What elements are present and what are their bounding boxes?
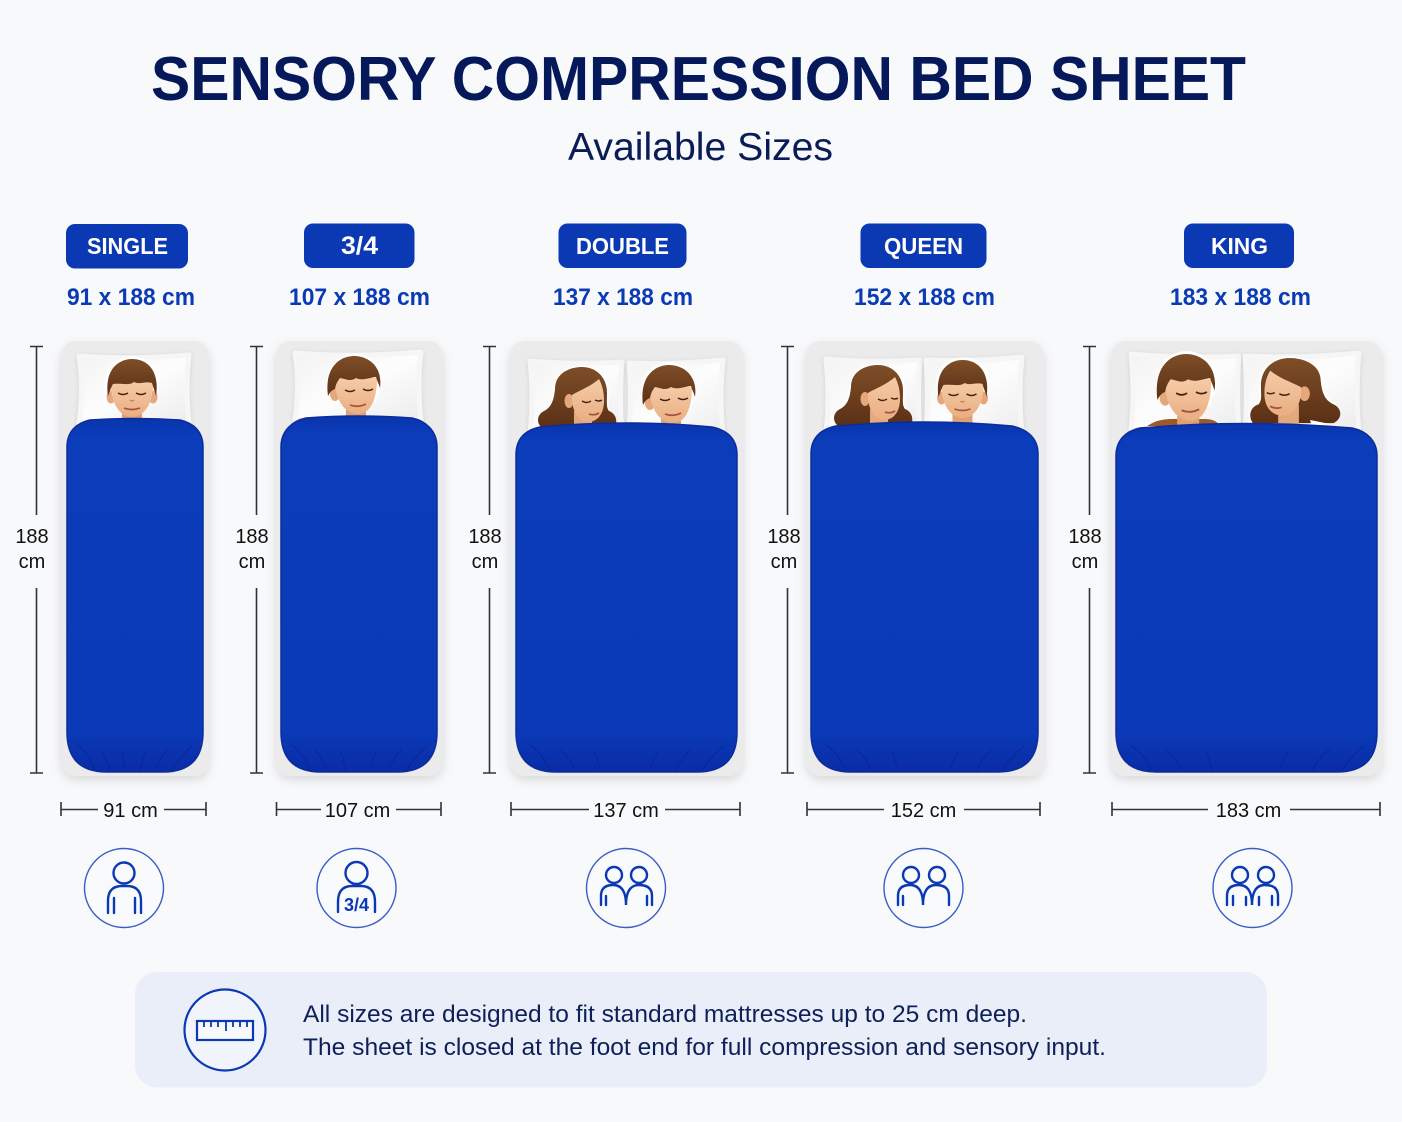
bed illustration: 3/4 (276, 341, 443, 776)
height dimension: single: 188 (15, 526, 49, 548)
icon: two people (586, 848, 666, 928)
title: SENSORY COMPRESSION BED SHEET (151, 45, 1246, 114)
child: 3/4 (327, 355, 380, 420)
child: single (106, 358, 158, 423)
height dimension: king (1068, 346, 1102, 773)
bed illustration: queen (806, 341, 1044, 776)
size: queen: 152 x 188 cm (854, 284, 995, 311)
badge: king: KING (1211, 233, 1268, 259)
panel: double (468, 224, 743, 928)
note panel (135, 972, 1267, 1088)
bed illustration: single (61, 341, 209, 776)
panel: king (1068, 224, 1382, 928)
bed illustration: double (510, 341, 743, 776)
badge: single (66, 224, 188, 268)
badge: 3/4 (304, 224, 414, 268)
icon: ruler (184, 990, 266, 1070)
size: single: 91 x 188 cm (67, 284, 195, 311)
height dimension: double: cm (472, 551, 498, 573)
icon: two people (1213, 848, 1292, 928)
badge: queen: QUEEN (884, 233, 963, 259)
height dimension: single: cm (19, 551, 45, 573)
badge: 3/4: 3/4 (341, 232, 378, 260)
badge: queen (860, 224, 986, 268)
width dimension: double (511, 800, 740, 822)
height dimension: 3/4: 188 (235, 526, 269, 548)
width dimension: 3/4 (276, 800, 441, 822)
height dimension: king: cm (1072, 551, 1098, 573)
height dimension: 3/4: cm (239, 551, 265, 573)
icon: three quarter person: 3/4 (344, 895, 369, 915)
panel: queen (767, 224, 1044, 928)
note text: All sizes are designed to fit standard mattresses up to 25 cm deep. (303, 1001, 1027, 1028)
width dimension: 3/4: 107 cm (325, 800, 390, 822)
subtitle: Available Sizes (568, 126, 833, 169)
width dimension: queen: 152 cm (891, 800, 956, 822)
icon: three quarter person (317, 848, 396, 928)
icon: two people (884, 848, 963, 928)
children: king (1147, 353, 1340, 428)
size: 3/4: 107 x 188 cm (289, 284, 430, 311)
badge: single: SINGLE (87, 233, 168, 259)
children: queen (834, 359, 988, 431)
height dimension: double (468, 346, 502, 773)
icon: one person (84, 848, 164, 928)
height dimension: queen: 188 (767, 526, 801, 548)
children: double (538, 364, 695, 433)
note text (303, 1001, 1106, 1061)
panel: three quarter (235, 224, 443, 928)
badge: king (1184, 224, 1294, 268)
height dimension: queen (767, 346, 801, 773)
badge: double: DOUBLE (576, 233, 669, 259)
height dimension: queen: cm (771, 551, 797, 573)
note text: The sheet is closed at the foot end for full compression and sensory input. (303, 1034, 1106, 1061)
bed illustration: king (1111, 341, 1382, 776)
size: double: 137 x 188 cm (553, 284, 693, 311)
width dimension: king: 183 cm (1216, 800, 1281, 822)
badge: double (558, 224, 686, 268)
width dimension: queen (807, 800, 1040, 822)
height dimension: single (15, 346, 49, 773)
height dimension: 3/4 (235, 346, 269, 773)
width dimension: single: 91 cm (103, 800, 158, 822)
panel: single (15, 224, 209, 928)
width dimension: king (1112, 800, 1380, 822)
width dimension: single (61, 800, 206, 822)
width dimension: double: 137 cm (593, 800, 659, 822)
height dimension: king: 188 (1068, 526, 1102, 548)
height dimension: double: 188 (468, 526, 502, 548)
size: king: 183 x 188 cm (1170, 284, 1311, 311)
